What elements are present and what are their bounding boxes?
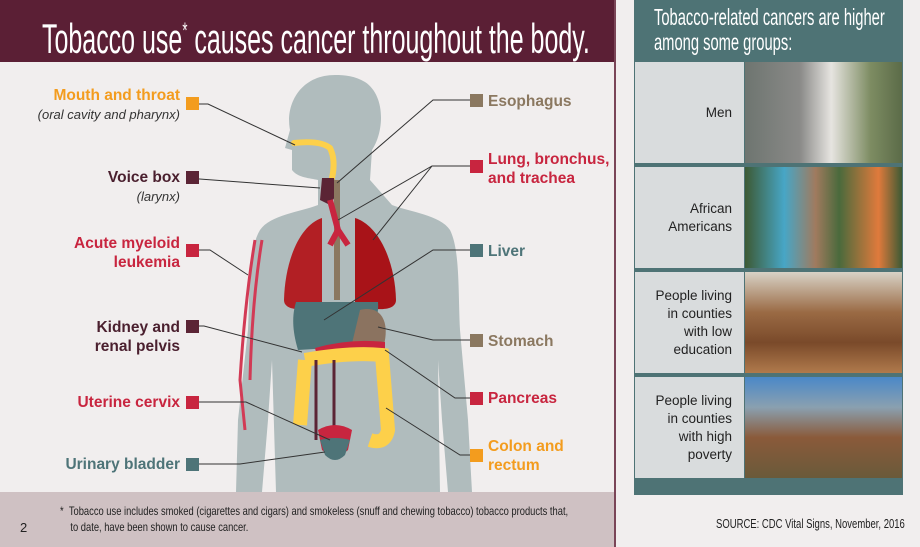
row: high poverty: People living xyxy=(655,392,732,408)
pancreas xyxy=(315,341,385,360)
text: leukemia xyxy=(114,254,180,271)
row: high poverty: in counties xyxy=(667,410,732,426)
footnote band xyxy=(0,492,615,547)
footnote band: to date, have been shown to cause cancer. xyxy=(70,520,248,534)
body diagram xyxy=(199,75,472,492)
text: Uterine cervix xyxy=(77,394,180,411)
text: Colon and xyxy=(488,438,564,455)
text: Kidney and xyxy=(96,319,180,336)
text: Voice box xyxy=(108,169,180,186)
panel heading: among some groups: xyxy=(654,29,792,55)
title bar xyxy=(0,0,615,62)
title bar: Tobacco use* causes cancer throughout the body. xyxy=(42,15,590,62)
row: low education: education xyxy=(673,342,732,356)
leukemia arm xyxy=(240,240,262,430)
kidneys ureters xyxy=(316,360,334,440)
labels left: (oral cavity and pharynx) xyxy=(38,107,180,122)
text: Lung, bronchus, xyxy=(488,151,609,168)
trachea xyxy=(330,200,348,245)
row: african americans xyxy=(635,167,902,268)
liver xyxy=(293,302,378,350)
text: Esophagus xyxy=(488,93,572,110)
mouth/throat xyxy=(294,142,334,178)
labels left: Mouth and throat xyxy=(53,87,180,104)
footnote band: 2 xyxy=(20,520,27,535)
silhouette xyxy=(236,75,472,492)
text: Stomach xyxy=(488,333,553,350)
stomach xyxy=(350,309,386,352)
row: african americans: African xyxy=(690,200,732,216)
uterus/bladder xyxy=(318,425,352,456)
text: and trachea xyxy=(488,170,575,187)
row: men: Men xyxy=(706,104,732,120)
text: rectum xyxy=(488,457,540,474)
esophagus xyxy=(334,180,340,300)
row: men xyxy=(635,62,902,163)
text: Liver xyxy=(488,243,525,260)
row: low education: with low xyxy=(684,324,732,338)
text: Pancreas xyxy=(488,390,557,407)
voice box xyxy=(320,178,336,205)
panel heading: Tobacco-related cancers are higher xyxy=(654,4,885,30)
leader lines xyxy=(186,100,470,464)
row: high poverty: poverty xyxy=(688,446,732,462)
footnote band: * Tobacco use includes smoked (cigarettes and cigars) and smokeless (snuff and chewing tobacco) tobacco products that, xyxy=(60,504,568,518)
panel heading xyxy=(654,4,885,55)
row: high poverty xyxy=(635,377,902,478)
labels left xyxy=(38,87,180,122)
text: Acute myeloid xyxy=(74,235,180,252)
right panel xyxy=(634,0,903,495)
labels right xyxy=(470,94,483,107)
text: renal pelvis xyxy=(95,338,180,355)
row: low education xyxy=(635,272,902,373)
row: high poverty: with high xyxy=(679,428,732,444)
colon xyxy=(300,354,388,441)
row: low education: in counties xyxy=(667,306,732,320)
text: Urinary bladder xyxy=(65,456,180,473)
row: low education: People living xyxy=(655,288,732,302)
text: (larynx) xyxy=(137,189,180,204)
lungs xyxy=(284,218,322,309)
source: SOURCE: CDC Vital Signs, November, 2016 xyxy=(716,517,905,531)
row: african americans: Americans xyxy=(668,218,732,234)
